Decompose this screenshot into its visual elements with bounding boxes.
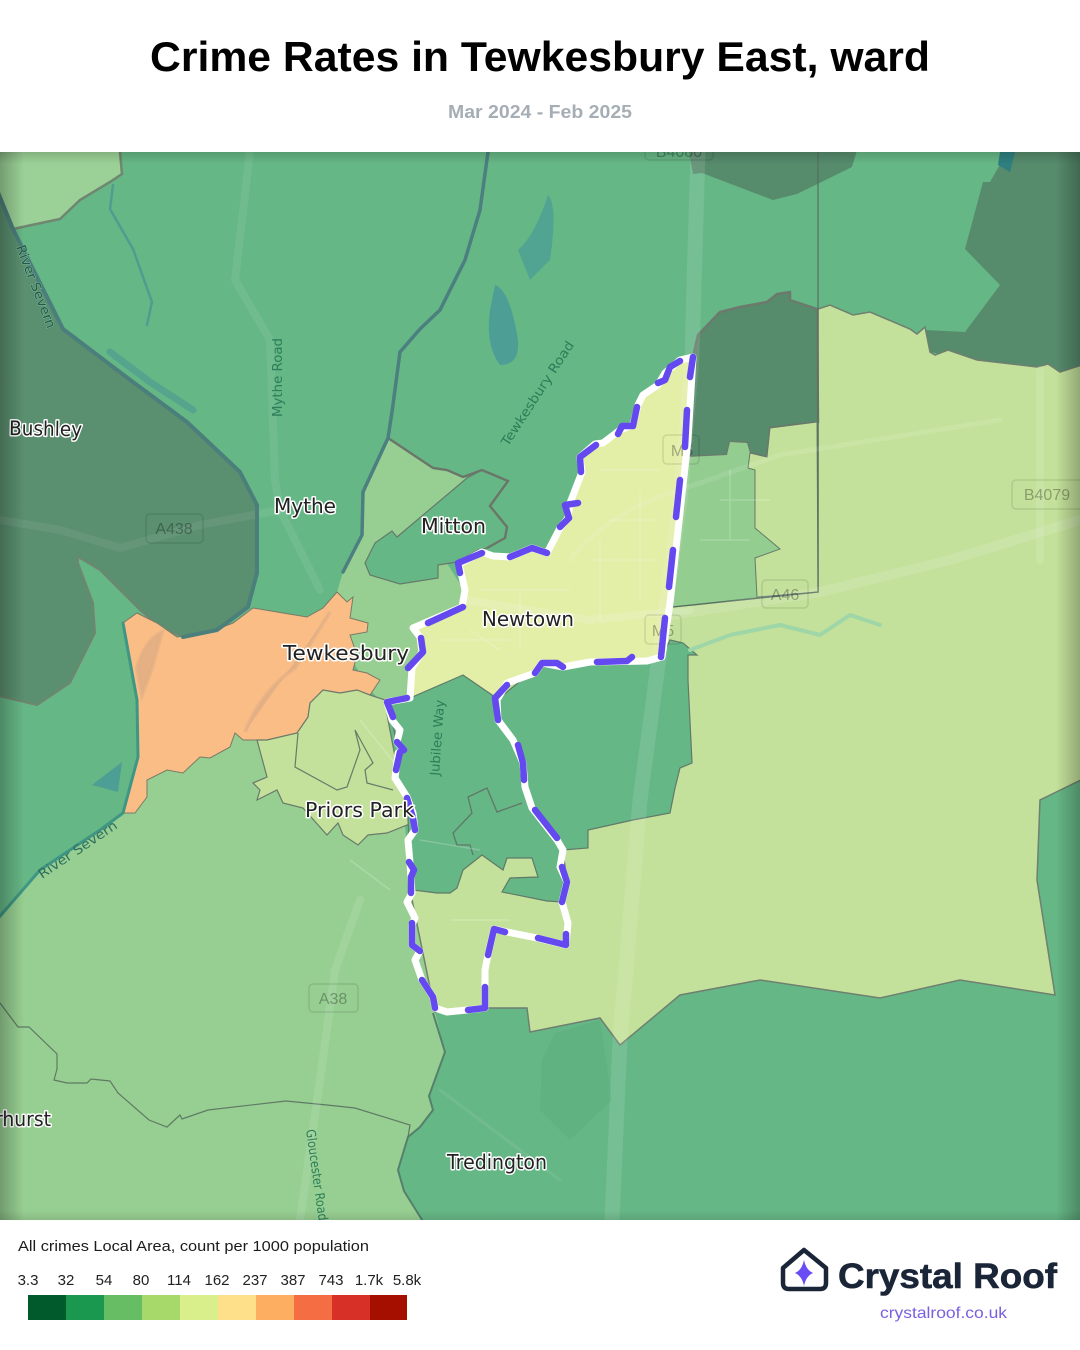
region: north-east dark patch [687, 292, 818, 457]
place labels: Bushley [9, 416, 82, 441]
logo wordmark: Crystal Roof [838, 1257, 1057, 1296]
legend tick values: 237 [242, 1272, 268, 1289]
legend tick values: 743 [318, 1272, 344, 1289]
region: green area east of ward [497, 640, 697, 850]
legend colour scale [28, 1295, 407, 1320]
region: Mitton green patch [364, 472, 488, 585]
legend tick values: 5.8k [393, 1272, 422, 1289]
legend tick values: 3.3 [18, 1272, 38, 1289]
legend [18, 1238, 422, 1320]
legend tick values: 80 [133, 1272, 149, 1289]
place labels: Mitton [421, 514, 486, 538]
county boundary line [672, 152, 818, 607]
Priors Park inner boundary [295, 730, 393, 790]
legend tick values: 162 [204, 1272, 230, 1289]
region: south-west light green area [0, 733, 445, 1225]
legend tick values: 114 [167, 1272, 191, 1289]
region: orange high-crime Tewkesbury area [123, 592, 380, 813]
boundary: north-west light area [13, 152, 122, 229]
region: north-west light area [0, 147, 122, 229]
legend tick values: 54 [96, 1272, 112, 1289]
legend tick values: 387 [280, 1272, 306, 1289]
legend tick values: 32 [58, 1272, 74, 1289]
boundary: Tredington edge [398, 1013, 445, 1223]
map edge vignette [0, 152, 1080, 1220]
region: north dark patch [689, 152, 856, 200]
road shields [146, 135, 1080, 1012]
road and river labels: River Severn [12, 243, 58, 331]
region: pale strip by the county line [748, 422, 818, 597]
road shields: A438 [155, 521, 193, 538]
region: light green patch east of ward [672, 442, 780, 607]
lakes [92, 152, 1015, 792]
rivers and water [0, 152, 880, 922]
legend tick values: 1.7k [355, 1272, 384, 1289]
place labels [0, 416, 574, 1174]
place labels: Tewkesbury [282, 641, 409, 665]
region: east pale green area [410, 305, 1080, 1045]
road shields: A38 [319, 991, 347, 1008]
road and river labels: Jubilee Way [428, 699, 448, 777]
road and river labels: River Severn [36, 818, 121, 882]
ward outline: white base [387, 357, 693, 1012]
region: Priors Park pale area [253, 690, 412, 845]
place labels: Priors Park [305, 798, 414, 822]
region: Bushley dark area [0, 190, 257, 705]
place labels: Newtown [482, 607, 574, 631]
road and river labels [12, 243, 578, 1222]
orange area road shading [137, 612, 330, 732]
logo: Crystal Roof [783, 1250, 1057, 1322]
subtitle: date range: Mar 2024 - Feb 2025 [448, 102, 632, 122]
road shields: B4080 [656, 144, 702, 161]
street texture [350, 470, 770, 920]
road and river labels: Mythe Road [271, 338, 286, 417]
region: far north-east dark area [925, 147, 1080, 380]
road shields: M5 [671, 443, 693, 460]
place labels: Mythe [274, 494, 336, 518]
region: Mitton and Tewkesbury light green area [337, 438, 470, 705]
place labels: Tredington [446, 1150, 547, 1174]
Jubilee Way inner boundaries [453, 788, 522, 855]
road and river labels: Gloucester Road [302, 1128, 330, 1222]
boundary: south-west parish line [0, 1003, 410, 1137]
icon: house with star [783, 1250, 826, 1289]
region: Jubilee Way green area [387, 675, 567, 902]
legend tick values [18, 1272, 422, 1289]
ward outline: purple dashes [387, 357, 693, 1010]
road shields: B4079 [1024, 487, 1070, 504]
region: darker patch near Tredington [540, 1020, 612, 1140]
title: Crime Rates in Tewkesbury East, ward [150, 33, 930, 80]
road shields: A46 [771, 587, 799, 604]
roads [0, 152, 1080, 1220]
region: ward north pale yellow area [410, 357, 693, 698]
road shields: M5 [652, 623, 674, 640]
boundary: Mitton north edge [388, 438, 508, 548]
logo website: crystalroof.co.uk [880, 1305, 1008, 1322]
road and river labels: Tewkesbury Road [498, 339, 578, 450]
legend title: All crimes Local Area, count per 1000 population [18, 1238, 369, 1255]
